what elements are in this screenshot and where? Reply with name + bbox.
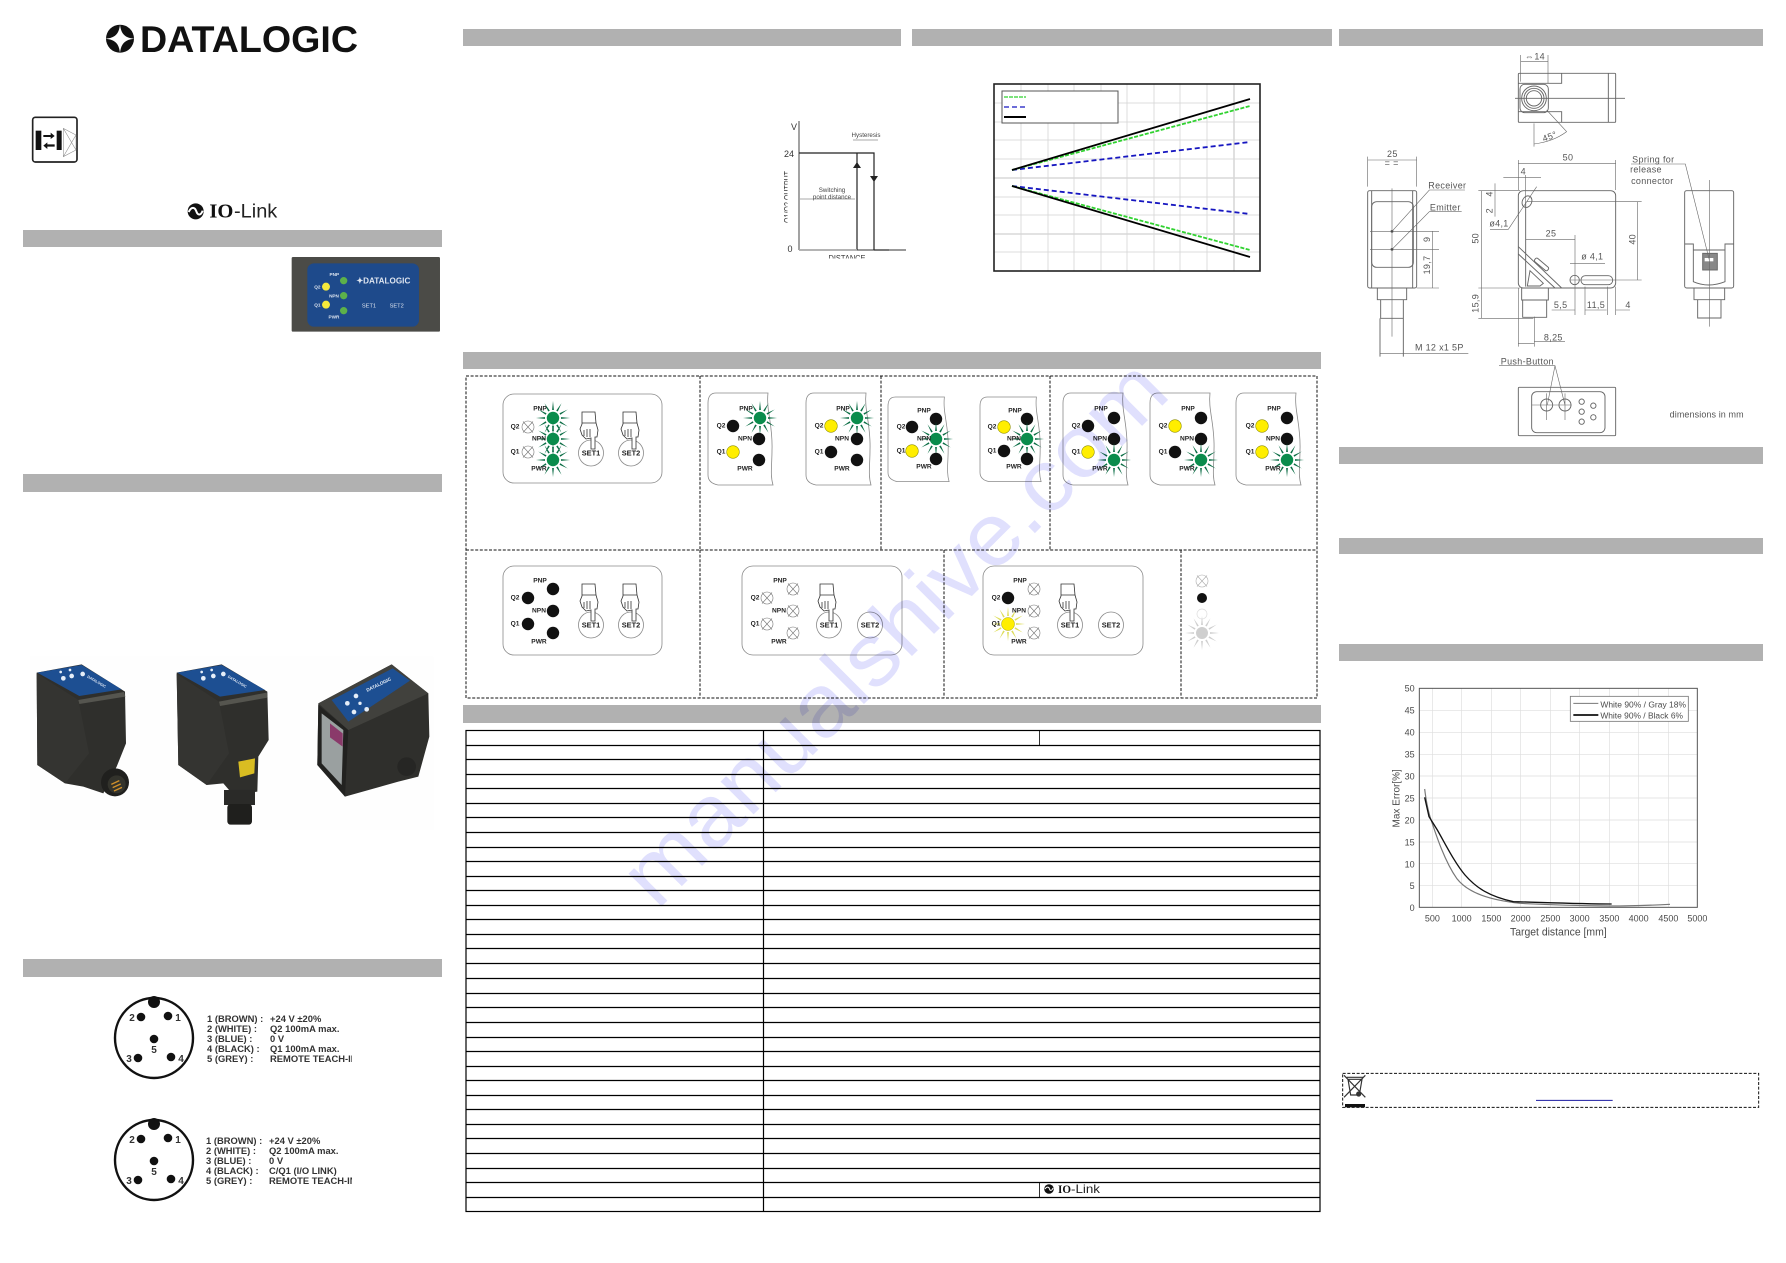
bottom view labels: dimensions in mm	[1670, 410, 1744, 420]
procedure: set1 pressed, q1 blinking: PNP	[1013, 578, 1027, 584]
procedure: pnp selected	[708, 393, 874, 485]
procedure: npn selected: PNP	[1008, 408, 1022, 414]
procedure: pnp selected: Q2	[717, 422, 726, 430]
procedure: set1 pressed, leds unchanged: SET2	[861, 620, 879, 630]
weee disposal notice	[1343, 1073, 1759, 1107]
procedure: power led states: Q1	[1072, 448, 1081, 456]
procedure: both buttons, all leds off	[503, 566, 662, 655]
sensor front panel photo: SET2	[390, 303, 404, 309]
chart axis labels: 5000	[1687, 913, 1707, 923]
procedure: pnp selected: PWR	[834, 466, 850, 472]
sensor photo 1: DATALOGIC	[86, 675, 107, 689]
chart curves	[1425, 789, 1670, 906]
pin assignment text: io-link: 3 (BLUE) :	[206, 1155, 251, 1166]
pin assignment text: io-link	[206, 1135, 357, 1186]
procedure: all leds blinking: SET1	[582, 448, 600, 458]
procedure: all leds blinking: Q2	[511, 424, 520, 430]
rear view labels: release	[1630, 165, 1662, 175]
front view	[1478, 160, 1642, 347]
m12 pinout diagram: io-link: 5	[151, 1167, 157, 1178]
m12 pinout diagram: io-link: 3	[126, 1176, 132, 1187]
side view labels: Receiver	[1428, 181, 1466, 191]
procedure: power led states: Q2	[1246, 422, 1255, 430]
procedure: both buttons, all leds off: NPN	[532, 608, 546, 614]
front view labels: 15,9	[1470, 294, 1480, 313]
pin assignment text: standard: 3 (BLUE) :	[207, 1033, 252, 1044]
sensor photo 1	[37, 664, 129, 796]
section header bars	[23, 29, 1763, 977]
bottom view	[1499, 366, 1616, 436]
switching output hysteresis graph: point distance	[813, 194, 852, 201]
front view labels: 2	[1485, 208, 1495, 213]
pin assignment text: io-link: 5 (GREY) :	[206, 1175, 252, 1186]
pin assignment text: standard: 5 (GREY) :	[207, 1053, 253, 1064]
procedure: pnp selected: PNP	[836, 406, 850, 412]
chart grid	[1419, 688, 1697, 907]
pin assignment text: standard: Q2 100mA max.	[270, 1023, 339, 1034]
m12 pinout diagram: io-link	[115, 1118, 357, 1200]
procedure: all leds blinking	[503, 394, 662, 483]
sensor photo 2	[177, 664, 269, 825]
io-link logo: -Link	[234, 202, 278, 223]
chart axis labels: 50	[1405, 684, 1415, 694]
switching output hysteresis graph: V	[791, 122, 797, 132]
chart legend	[1570, 696, 1688, 721]
pin assignment text: io-link: C/Q1 (I/O LINK)	[269, 1165, 337, 1176]
procedure: power led states: NPN	[1266, 436, 1280, 442]
procedure: set1 pressed, leds unchanged: Q1	[751, 620, 760, 628]
sensor front panel photo: ✦DATALOGIC	[356, 276, 410, 286]
m12 pinout diagram: standard: 1	[175, 1013, 181, 1024]
sensor photo 2: DATALOGIC	[227, 675, 248, 689]
chart lines	[1012, 99, 1250, 257]
procedure: all leds blinking: PWR	[531, 466, 547, 472]
io-link logo: IO	[209, 201, 233, 223]
switching output hysteresis graph	[782, 121, 906, 263]
procedure: npn selected: NPN	[917, 436, 931, 442]
rear view	[1631, 164, 1734, 327]
side view labels: = =	[1385, 158, 1399, 168]
chart legend	[1002, 91, 1118, 123]
procedure: power led states: NPN	[1093, 436, 1107, 442]
procedure: both buttons, all leds off: PWR	[531, 638, 547, 646]
chart axis labels: 30	[1405, 771, 1415, 781]
procedure: npn selected: PWR	[916, 464, 932, 470]
side view labels	[1385, 149, 1466, 353]
m12 pinout diagram: standard: 3	[126, 1054, 132, 1065]
side view labels: 19,7	[1422, 256, 1432, 274]
chart axis labels: 20	[1405, 815, 1415, 825]
sensor product photos	[30, 657, 433, 830]
pin assignment text: standard: Q1 100mA max.	[270, 1043, 339, 1054]
chart axis labels: 500	[1425, 913, 1440, 923]
procedure: set1 pressed, leds unchanged: Q2	[751, 594, 760, 602]
procedure: both buttons, all leds off: Q1	[511, 620, 520, 628]
front view labels: 50	[1470, 233, 1480, 244]
switching output hysteresis graph: Switching	[819, 187, 846, 194]
procedure: npn selected: NPN	[1007, 436, 1021, 442]
pin assignment text: standard: REMOTE TEACH-IN	[270, 1053, 358, 1064]
top view	[1515, 55, 1625, 147]
pin assignment text: standard: +24 V ±20%	[270, 1013, 322, 1024]
front view labels: 4	[1625, 300, 1631, 310]
sensor front panel photo: Q2	[314, 284, 321, 289]
icon: crossed-out wheelie bin	[1344, 1075, 1365, 1107]
procedure: power led states: Q1	[1246, 448, 1255, 456]
rear view labels: Spring for	[1632, 154, 1674, 164]
procedure: set1 pressed, leds unchanged: PWR	[771, 638, 787, 646]
procedure: set1 pressed, leds unchanged: PNP	[773, 578, 787, 584]
chart axis labels: 10	[1405, 859, 1415, 869]
procedure: npn selected	[888, 397, 1044, 482]
chart axis labels: 1000	[1452, 913, 1472, 923]
m12 pinout diagram: io-link: 1	[175, 1135, 181, 1146]
front view labels: 25	[1546, 229, 1556, 239]
front view labels: 40	[1628, 234, 1638, 245]
m12 pinout diagram: standard: 4	[178, 1054, 184, 1065]
m12 pinout diagram: io-link: 2	[129, 1135, 135, 1146]
switching output hysteresis graph: DISTANCE	[828, 254, 866, 263]
procedure: all leds blinking: SET2	[622, 448, 640, 458]
procedure: npn selected: PWR	[1006, 464, 1022, 470]
procedure: npn selected: PNP	[917, 408, 931, 414]
chart axis labels	[1391, 684, 1707, 939]
covers clipping the pin text	[352, 1010, 372, 1190]
switching output hysteresis graph: Q1/Q2 OUTPUT	[782, 171, 792, 223]
pin assignment text: standard: 4 (BLACK) :	[207, 1043, 260, 1054]
chart axis labels: Max Error[%]	[1391, 769, 1402, 827]
m12 pinout diagram: standard: 2	[129, 1013, 135, 1024]
procedure: pnp selected: PWR	[737, 466, 753, 472]
procedure: pnp selected: NPN	[738, 436, 752, 442]
brand logo: DATALOGIC	[140, 19, 358, 60]
io-link logo in table: IO	[1058, 1182, 1071, 1196]
specifications table	[466, 730, 1320, 1212]
procedure: pnp selected: Q2	[815, 422, 824, 430]
side view labels: M 12 x1 5P	[1415, 343, 1464, 353]
procedure: set1 pressed, q1 blinking: Q1	[992, 620, 1001, 628]
pin assignment text: standard: 0 V	[270, 1033, 285, 1044]
switching output hysteresis graph: 0	[787, 244, 793, 254]
front view labels	[1470, 152, 1638, 343]
io-link logo in table: -Link	[1071, 1182, 1101, 1196]
procedure: set1 pressed, q1 blinking: NPN	[1012, 608, 1026, 614]
side view	[1368, 157, 1468, 357]
procedure: power led states: PNP	[1181, 406, 1195, 412]
procedure: power led states: PNP	[1267, 406, 1281, 412]
io-link logo	[188, 201, 278, 223]
icon: sensor function symbol	[33, 117, 77, 162]
chart axis labels: 40	[1405, 728, 1415, 738]
front view labels: ø4,1	[1489, 219, 1509, 229]
sensor front panel photo: PWR	[329, 315, 340, 320]
procedure: set1 pressed, q1 blinking: SET2	[1102, 620, 1120, 630]
pin assignment text: standard: 1 (BROWN) :	[207, 1013, 263, 1024]
chart axis labels: 15	[1405, 837, 1415, 847]
front view labels: ø 4,1	[1581, 251, 1603, 261]
chart legend: White 90% / Black 6%	[1600, 710, 1684, 720]
led procedures grid	[466, 376, 1317, 698]
procedure: both buttons, all leds off: SET1	[582, 620, 600, 630]
front view labels: 5,5	[1554, 300, 1567, 310]
procedure: power led states: NPN	[1180, 436, 1194, 442]
m12 pinout diagram: io-link: 4	[178, 1176, 184, 1187]
rear view labels: connector	[1631, 176, 1674, 186]
procedure: set1 pressed, q1 blinking: SET1	[1061, 620, 1079, 630]
watermark: manualshive.com	[600, 339, 1186, 924]
switching output hysteresis graph: 24	[784, 149, 794, 159]
procedure: npn selected: Q2	[897, 424, 906, 430]
procedure: both buttons, all leds off: SET2	[622, 620, 640, 630]
spot size line chart	[994, 84, 1260, 271]
front view labels: 11,5	[1587, 300, 1605, 310]
sensor photo 3	[317, 664, 429, 797]
procedure: set1 pressed, leds unchanged	[742, 566, 902, 655]
procedure: pnp selected: Q1	[717, 448, 726, 456]
pin assignment text: io-link: +24 V ±20%	[269, 1135, 321, 1146]
chart frame	[1419, 688, 1697, 907]
chart axis labels: 4500	[1658, 913, 1678, 923]
sensor front panel photo: NPN	[329, 293, 340, 298]
max error line chart	[1391, 684, 1707, 939]
chart axis labels: 45	[1405, 706, 1415, 716]
sensor front panel photo: PNP	[330, 272, 339, 277]
link underline	[1536, 1099, 1613, 1102]
procedure: power led states: PWR	[1179, 466, 1195, 472]
sensor front panel photo	[292, 257, 440, 332]
procedure: power led states: Q2	[1072, 422, 1081, 430]
m12 pinout diagram: standard: 5	[151, 1045, 157, 1056]
procedure: power led states: PWR	[1092, 466, 1108, 472]
side view labels: Emitter	[1430, 202, 1461, 212]
front view labels: 4	[1485, 191, 1495, 197]
pin assignment text: io-link: 1 (BROWN) :	[206, 1135, 262, 1146]
chart axis labels: 4000	[1629, 913, 1649, 923]
top view labels: 45°	[1541, 129, 1558, 144]
pin assignment text: io-link: Q2 100mA max.	[269, 1145, 338, 1156]
pin assignment text: io-link: 4 (BLACK) :	[206, 1165, 259, 1176]
procedure: set1 pressed, leds unchanged: NPN	[772, 608, 786, 614]
top view labels: ⇔14	[1525, 51, 1545, 61]
chart axis labels: 2500	[1540, 913, 1560, 923]
pin assignment text: io-link: 2 (WHITE) :	[206, 1145, 256, 1156]
procedure: set1 pressed, leds unchanged: SET1	[820, 620, 838, 630]
chart axis labels: 1500	[1481, 913, 1501, 923]
chart axis labels: 25	[1405, 793, 1415, 803]
bottom view labels	[1501, 356, 1744, 420]
procedure: set1 pressed, q1 blinking: Q2	[992, 594, 1001, 602]
procedure: npn selected: Q2	[988, 424, 997, 430]
chart axis labels: Target distance [mm]	[1510, 927, 1607, 939]
front view labels: 4	[1521, 167, 1526, 177]
sensor photo 3: DATALOGIC	[365, 676, 392, 693]
procedure: set1 pressed, q1 blinking	[983, 566, 1143, 655]
front view labels: 8,25	[1544, 333, 1563, 343]
procedure: power led states: Q2	[1159, 422, 1168, 430]
chart axis labels: 3500	[1599, 913, 1619, 923]
sensor front panel photo: Q1	[314, 302, 321, 307]
side view labels: 9	[1422, 237, 1432, 242]
pin assignment text: io-link: 0 V	[269, 1155, 284, 1166]
pin assignment text: standard: 2 (WHITE) :	[207, 1023, 257, 1034]
top view labels	[1525, 51, 1558, 144]
procedure: all leds blinking: Q1	[511, 448, 520, 456]
procedure: both buttons, all leds off: PNP	[533, 578, 547, 584]
bottom view labels: Push-Button	[1501, 356, 1554, 366]
mechanical dimensions drawing	[1368, 51, 1744, 436]
procedure: npn selected: Q1	[897, 448, 906, 454]
io-link logo in table	[1044, 1182, 1101, 1196]
chart axis labels: 2000	[1511, 913, 1531, 923]
chart axis labels: 0	[1410, 903, 1415, 913]
switching output hysteresis graph: Hysteresis	[852, 132, 880, 139]
procedure: power led states: Q1	[1159, 448, 1168, 456]
chart axis labels: 3000	[1570, 913, 1590, 923]
procedure: both buttons, all leds off: Q2	[511, 594, 520, 602]
procedure: pnp selected: Q1	[815, 448, 824, 456]
side view labels: 25	[1387, 149, 1398, 159]
front view labels: 50	[1563, 152, 1573, 162]
procedure: power led states	[1063, 393, 1304, 485]
procedure: all leds blinking: PNP	[533, 406, 547, 412]
procedure: set1 pressed, q1 blinking: PWR	[1011, 638, 1027, 646]
procedure: pnp selected: NPN	[835, 436, 849, 442]
sensor front panel photo: SET1	[362, 303, 376, 309]
procedure: all leds blinking: NPN	[532, 436, 546, 442]
procedure: power led states: PNP	[1094, 406, 1108, 412]
pin assignment text: standard	[207, 1013, 358, 1064]
procedure: npn selected: Q1	[988, 448, 997, 454]
chart axis labels: 35	[1405, 750, 1415, 760]
procedure: power led states: PWR	[1265, 466, 1281, 472]
led state legend	[1185, 575, 1219, 650]
chart legend: White 90% / Gray 18%	[1600, 700, 1687, 710]
rear view labels	[1630, 154, 1674, 186]
pin assignment text: io-link: REMOTE TEACH-IN	[269, 1175, 357, 1186]
procedure: pnp selected: PNP	[739, 406, 753, 412]
m12 pinout diagram: standard	[115, 996, 358, 1078]
chart axis labels: 5	[1410, 881, 1415, 891]
